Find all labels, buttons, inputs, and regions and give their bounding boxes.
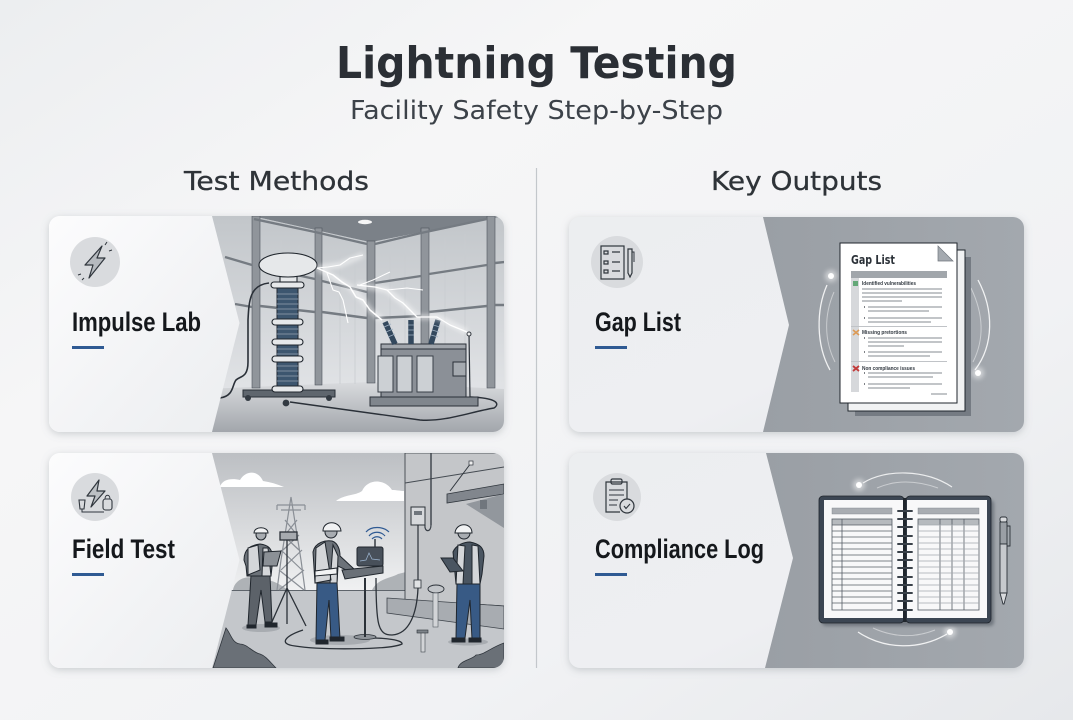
illustration: impulse lab scene: [205, 216, 505, 432]
chevron background: [763, 217, 1024, 432]
cable: [220, 283, 269, 398]
panel: field test: [49, 453, 505, 670]
document: gap list: Gap List: [851, 252, 895, 267]
meter box and conduit: [411, 507, 425, 525]
building: [405, 453, 505, 606]
label: field test: Field Test: [72, 534, 175, 564]
icon: checklist and pen: [591, 236, 643, 288]
worker left: [242, 528, 281, 632]
worker centre: [310, 523, 370, 645]
label: impulse lab: Impulse Lab: [72, 307, 201, 337]
worker right: [441, 525, 488, 646]
tower: [277, 497, 305, 590]
test console with laptop: [342, 539, 383, 640]
illustration: field test scene: [205, 453, 505, 670]
document: gap list: Missing pretortions: [862, 330, 907, 336]
icon: bolt with terminals: [71, 473, 119, 521]
accent line: [72, 346, 104, 349]
column divider: [536, 168, 538, 668]
lightning arcs: [317, 255, 467, 332]
title: Lightning Testing: [336, 38, 737, 89]
accent line: [595, 573, 627, 576]
accent line: [595, 346, 627, 349]
panel: impulse lab: [49, 216, 505, 432]
icon: lightning bolt: [70, 237, 120, 287]
notebook: [819, 496, 994, 626]
heading: test methods: Test Methods: [183, 167, 369, 197]
light arcs: [853, 473, 956, 646]
document: gap list: Identified vulnerabilities: [862, 281, 916, 287]
chevron panel: [49, 453, 240, 668]
panel: gap list: [569, 217, 1024, 432]
icon: pen: [1000, 517, 1010, 604]
icon: clipboard with check: [593, 473, 641, 521]
bushes: [213, 628, 276, 668]
chevron panel: [49, 216, 240, 432]
document: gap list: [840, 243, 971, 416]
impulse generator: [243, 390, 335, 397]
tripod: [271, 532, 306, 626]
subtitle: Facility Safety Step-by-Step: [350, 96, 723, 126]
light arcs: [819, 270, 990, 379]
panel: compliance log: [569, 453, 1024, 668]
chevron background: [765, 453, 1024, 668]
document: gap list: Non compliance issues: [862, 366, 915, 372]
transformer: [370, 397, 478, 406]
ground loop and sensors: [285, 630, 402, 649]
label: compliance log: Compliance Log: [595, 534, 764, 564]
accent line: [72, 573, 104, 576]
heading: key outputs: Key Outputs: [711, 167, 882, 197]
icon: wifi signal: [366, 528, 389, 539]
label: gap list: Gap List: [595, 307, 681, 337]
